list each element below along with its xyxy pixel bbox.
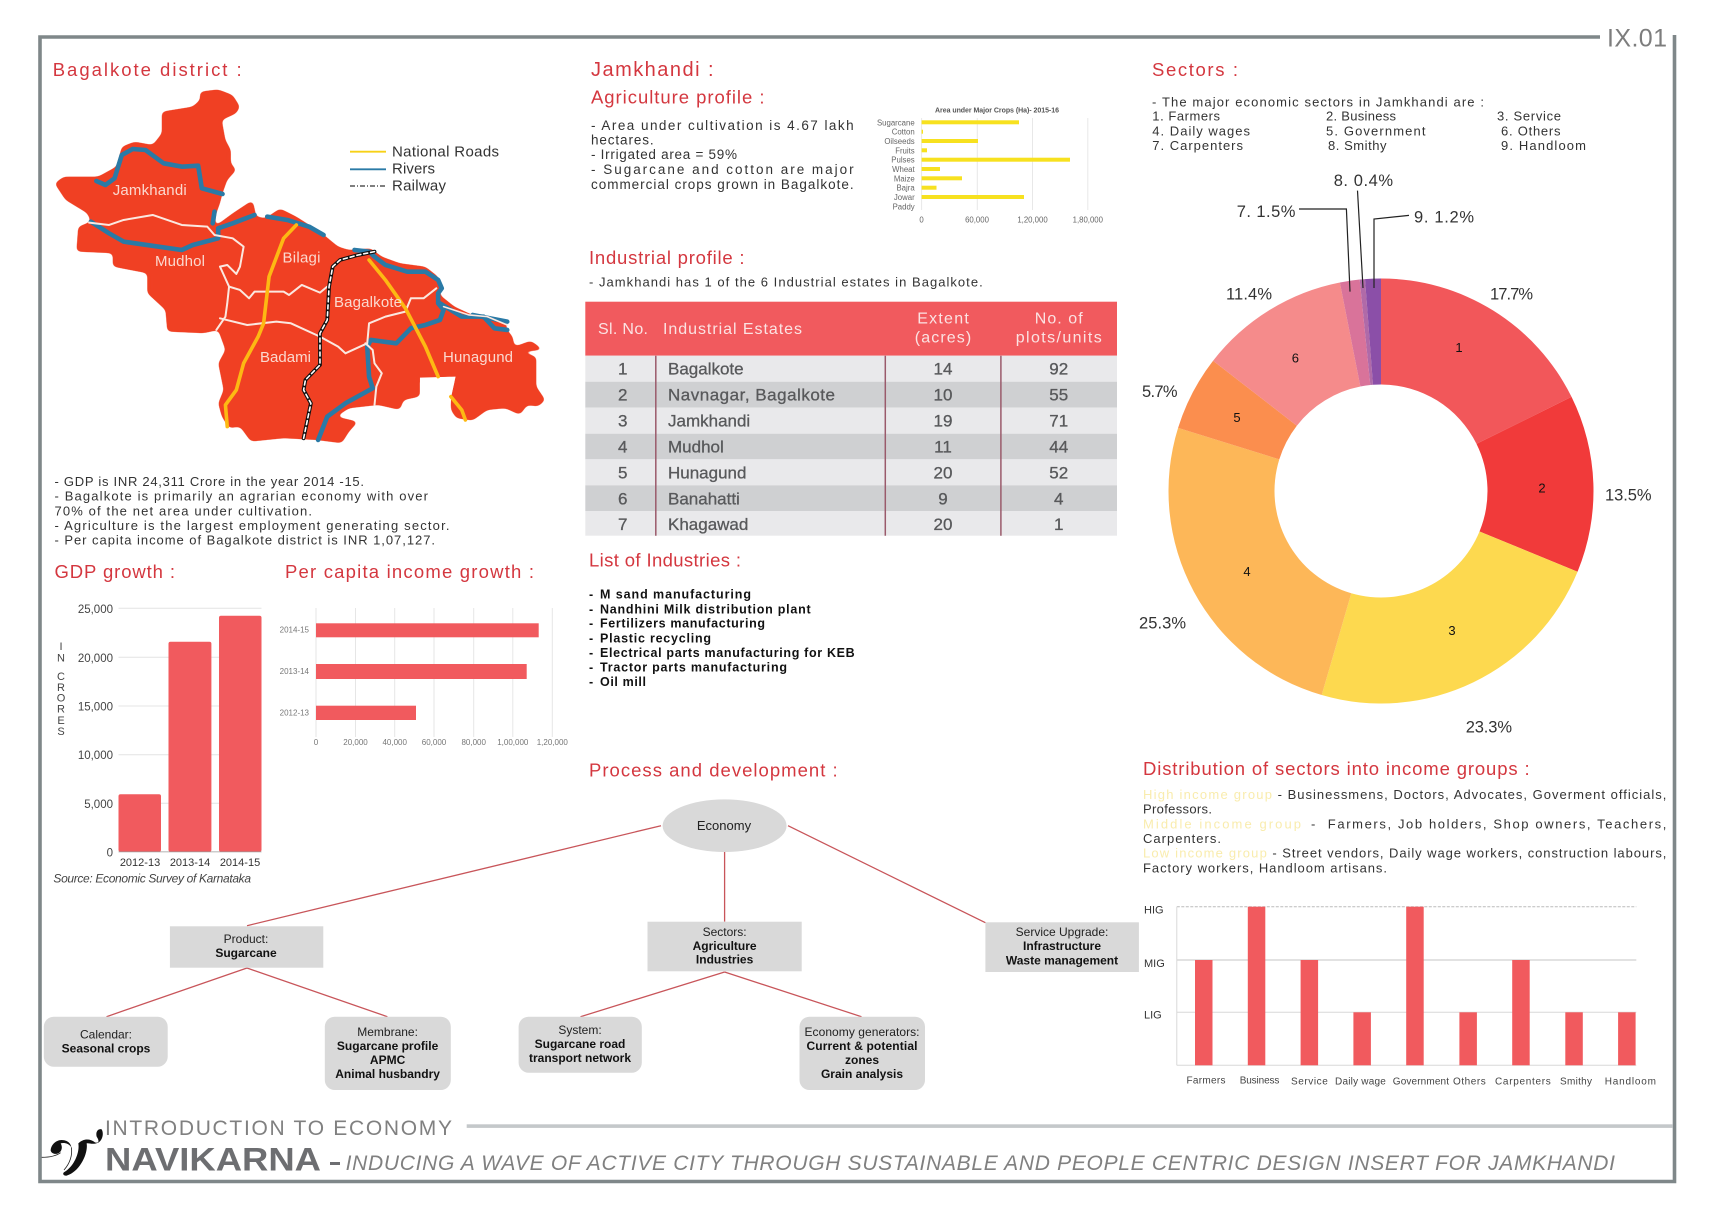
text block: income groups: Low income group <box>1143 846 1267 861</box>
node: system: transport network <box>529 1051 631 1065</box>
text block: agriculture: - Area under cultivation is 4.67 lakh <box>591 118 854 133</box>
table rows: Mudhol <box>668 438 724 457</box>
table header: Extent <box>917 310 969 327</box>
table rows: 6 <box>618 489 627 508</box>
bar chart: sectors by income group: LIG <box>1144 1010 1162 1022</box>
list: industries: Tractor parts manufacturing <box>600 661 787 675</box>
text block: district facts: - Per capita income of Bagalkote district is INR 1,07,127. <box>54 533 435 548</box>
bar chart: per capita income: 2013-14 <box>280 667 310 676</box>
map: place labels: Badami <box>260 349 311 366</box>
donut percentage labels: 5.7% <box>1142 383 1178 401</box>
donut chart: sectors: 2 <box>1538 480 1546 496</box>
table rows: 4 <box>1054 489 1063 508</box>
list: industries: - <box>589 631 593 645</box>
axis title: in crores: C <box>57 671 65 683</box>
map: railway <box>304 252 375 438</box>
text block: sector list: 6. Others <box>1501 124 1561 138</box>
node: economy generators: Current & potential <box>806 1039 918 1053</box>
node: membrane: Sugarcane profile <box>337 1039 439 1053</box>
node: service upgrade: Service Upgrade: <box>1016 925 1108 939</box>
axis title: in crores: N <box>57 652 65 664</box>
bar chart: sectors by income group: Smithy <box>1560 1076 1592 1087</box>
table rows: 52 <box>1049 463 1068 482</box>
text block: income groups: High income group <box>1143 787 1272 802</box>
bar chart: area under major crops: Pulses <box>891 156 915 165</box>
donut callouts: 7. 1.5% <box>1237 203 1296 221</box>
list: industries: Fertilizers manufacturing <box>600 617 765 631</box>
footer title: introduction to economy: INTRODUCTION TO ECONOMY <box>105 1117 452 1140</box>
text block: sector list: 7. Carpenters <box>1152 138 1244 153</box>
node: calendar: Seasonal crops <box>62 1041 151 1055</box>
list: industries: - <box>589 675 593 689</box>
node: product: Sugarcane <box>215 946 277 960</box>
node: economy generators: Economy generators: <box>804 1025 920 1039</box>
map: place labels <box>113 182 513 366</box>
node: service upgrade: Infrastructure <box>1023 939 1101 953</box>
text: industrial estates note: - Jamkhandi has 1 of the 6 Industrial estates in Bagalkote. <box>589 275 983 290</box>
table rows: Hunagund <box>668 463 746 482</box>
bar chart: GDP growth <box>57 604 262 869</box>
text block: income groups: - Businessmens, Doctors, Advocates, Goverment officials, <box>1278 787 1666 802</box>
node: system: Sugarcane road <box>535 1037 625 1051</box>
text block: district facts: - Agriculture is the largest employment generating sector. <box>54 518 449 533</box>
node: service upgrade <box>985 922 1139 972</box>
node: sectors: Sectors: <box>703 925 747 939</box>
bar chart: GDP growth: 15,000 <box>78 702 113 714</box>
heading: sectors: Sectors : <box>1152 59 1238 80</box>
node: membrane: Animal husbandry <box>335 1067 440 1081</box>
heading: list of industries: List of Industries : <box>589 550 741 571</box>
node: economy generators: zones <box>845 1053 879 1067</box>
bar chart: GDP growth: 20,000 <box>78 653 113 665</box>
bar chart: GDP growth: 5,000 <box>84 799 113 811</box>
bar chart: area under major crops: Fruits <box>895 146 915 155</box>
node: membrane <box>325 1017 451 1090</box>
text block: district facts: 70% of the net area under cultivation. <box>54 503 312 518</box>
bar chart: area under major crops: Maize <box>894 174 915 183</box>
table rows: 9 <box>938 489 948 508</box>
text block: sector list: - The major economic sectors in Jamkhandi are : <box>1152 95 1484 110</box>
flow diagram: process and development <box>44 799 1139 1090</box>
bar chart: sectors by income group: Government <box>1393 1076 1449 1087</box>
bar chart: per capita income <box>280 608 568 747</box>
list: industries: - <box>589 661 593 675</box>
bar chart: sectors by income group: HIG <box>1144 904 1164 916</box>
list: industries <box>589 587 855 689</box>
text block: agriculture: hectares. <box>591 132 654 148</box>
table header: (acres) <box>915 330 971 347</box>
text block: sector list: 4. Daily wages <box>1152 124 1250 138</box>
node: calendar: Calendar: <box>80 1027 132 1041</box>
list: industries: Nandhini Milk distribution plant <box>600 602 812 616</box>
axis title: in crores: E <box>57 715 65 727</box>
node: sectors <box>648 922 802 971</box>
connector lines <box>106 826 985 1017</box>
donut callouts <box>1237 172 1474 292</box>
table rows: 4 <box>618 438 627 457</box>
text block: sector list <box>1152 95 1586 153</box>
table rows: Jamkhandi <box>668 412 750 431</box>
text block: sector list: 1. Farmers <box>1152 108 1220 123</box>
axis title: in crores <box>57 641 66 738</box>
bar chart: per capita income: 2014-15 <box>280 626 310 635</box>
bar chart: area under major crops: Paddy <box>893 202 915 211</box>
table rows: Navnagar, Bagalkote <box>668 386 835 405</box>
bar chart: GDP growth: 0 <box>107 848 113 860</box>
table rows: Bagalkote <box>668 360 744 379</box>
text block: income groups: Factory workers, Handloom artisans. <box>1143 860 1387 875</box>
list: industries: Oil mill <box>600 675 646 689</box>
table rows: 1 <box>1054 515 1063 534</box>
table rows: 7 <box>618 515 627 534</box>
bar chart: sectors by income group: Others <box>1453 1076 1486 1087</box>
node: economy: Economy <box>697 818 752 833</box>
axis title: in crores: I <box>59 641 63 653</box>
axis title: in crores: R <box>57 704 65 716</box>
bar chart: area under major crops <box>877 108 1104 225</box>
bar chart: per capita income: 1,20,000 <box>537 738 568 747</box>
bar chart: GDP growth: 2012-13 <box>120 857 160 869</box>
node: system <box>519 1017 642 1073</box>
bar chart: sectors by income group: Carpenters <box>1495 1076 1551 1087</box>
axis title: in crores: O <box>57 692 66 704</box>
text block: district facts <box>54 474 449 548</box>
table rows: Banahatti <box>668 489 740 508</box>
node: membrane: Membrane: <box>357 1025 418 1039</box>
donut percentage labels: 11.4% <box>1226 285 1272 303</box>
table rows: 44 <box>1049 438 1068 457</box>
node: calendar <box>44 1017 168 1067</box>
table rows: 20 <box>934 463 952 482</box>
bar chart: area under major crops: Wheat <box>892 165 916 174</box>
bar chart: GDP growth: 2014-15 <box>220 857 260 869</box>
donut chart: sectors: 5 <box>1233 410 1241 425</box>
bar chart: GDP growth: 2013-14 <box>170 857 210 869</box>
text block: agriculture <box>591 118 854 192</box>
text block: agriculture: - Irrigated area = 59% <box>591 147 737 162</box>
text block: district facts: - GDP is INR 24,311 Crore in the year 2014 -15. <box>54 474 364 489</box>
donut chart: sectors: 1 <box>1455 340 1463 355</box>
text block: income groups: Middle income group <box>1143 816 1301 831</box>
heading: agriculture profile: Agriculture profile : <box>591 86 764 107</box>
table rows <box>585 356 1117 536</box>
node: service upgrade: Waste management <box>1006 954 1118 968</box>
donut chart: sectors: 6 <box>1292 350 1299 366</box>
bar chart: area under major crops: Area under Major Crops (Ha)- 2015-16 <box>935 108 1059 115</box>
table rows: Khagawad <box>668 515 748 534</box>
bar chart: area under major crops: Cotton <box>892 128 915 137</box>
map legend: National Roads <box>392 144 499 161</box>
axis title: in crores: R <box>57 682 65 694</box>
table rows: 55 <box>1049 386 1068 405</box>
heading: distribution of sectors: Distribution of sectors into income groups : <box>1143 758 1530 779</box>
donut percentage labels: 17.7% <box>1490 285 1533 303</box>
table rows: 71 <box>1049 412 1068 431</box>
bar chart: area under major crops: Sugarcane <box>877 118 915 127</box>
bar chart: area under major crops: Oilseeds <box>884 137 915 146</box>
map legend <box>350 144 499 195</box>
table rows: 3 <box>618 412 627 431</box>
donut chart: sectors: 4 <box>1243 564 1251 579</box>
text block: income groups: Professors. <box>1143 802 1212 817</box>
donut percentage labels: 25.3% <box>1139 615 1186 633</box>
list: industries: - <box>589 602 593 616</box>
list: industries: - <box>589 617 593 631</box>
bar chart: area under major crops: 60,000 <box>965 216 990 225</box>
map: place labels: Hunagund <box>443 349 513 366</box>
table rows: 1 <box>618 360 627 379</box>
bar chart: sectors by income group: Daily wage <box>1335 1076 1386 1087</box>
map: place labels: Jamkhandi <box>113 182 187 199</box>
node: system: System: <box>558 1023 602 1037</box>
bar chart: per capita income: 60,000 <box>422 738 447 747</box>
list: industries: M sand manufacturing <box>600 587 751 601</box>
table: industrial estates <box>585 302 1117 536</box>
heading: per capita income growth: Per capita income growth : <box>285 561 534 582</box>
text block: income groups: Carpenters. <box>1143 831 1221 846</box>
text block: income groups: - <box>1311 816 1315 831</box>
node: sectors: Industries <box>696 952 754 966</box>
donut callouts: 9. 1.2% <box>1414 209 1474 227</box>
table rows: 5 <box>618 463 627 482</box>
map: national roads <box>225 225 465 427</box>
bar chart: sectors by income group: Service <box>1291 1076 1328 1087</box>
bar chart: sectors by income group: Business <box>1240 1075 1279 1086</box>
heading: Jamkhandi: Jamkhandi : <box>591 59 714 81</box>
bar chart: GDP growth: 25,000 <box>78 604 113 616</box>
bar chart: per capita income: 40,000 <box>382 738 407 747</box>
map: place labels: Bilagi <box>282 250 320 266</box>
donut percentage labels <box>1139 285 1652 736</box>
text block: agriculture: - Sugarcane and cotton are major <box>591 162 854 177</box>
map: place labels: Mudhol <box>155 253 205 270</box>
text block: sector list: 2. Business <box>1326 108 1396 123</box>
source note: Source: Economic Survey of Karnataka <box>53 872 251 886</box>
bar chart: area under major crops: Jowar <box>894 193 915 202</box>
list: industries: - <box>589 646 593 660</box>
table rows: 92 <box>1049 360 1068 379</box>
logo: Navikarna swirl <box>42 1129 103 1176</box>
text block: income groups: Farmers, Job holders, Shop owners, Teachers, <box>1328 816 1666 831</box>
map: Bagalkote district <box>55 89 545 443</box>
donut callouts: 8. 0.4% <box>1334 172 1393 190</box>
list: industries: Electrical parts manufacturing for KEB <box>600 646 855 660</box>
bar chart: area under major crops: Bajra <box>896 184 915 193</box>
donut chart: sectors <box>1168 278 1593 703</box>
heading: GDP growth: GDP growth : <box>54 561 175 582</box>
bar chart: sectors by income group: MIG <box>1144 958 1165 970</box>
bar chart: area under major crops: 1,80,000 <box>1073 216 1104 225</box>
text block: income groups <box>1143 787 1666 875</box>
donut percentage labels: 23.3% <box>1466 718 1512 736</box>
table header: plots/units <box>1016 330 1102 347</box>
bar chart: per capita income: 80,000 <box>461 738 486 747</box>
map legend: Rivers <box>392 161 435 178</box>
node: product: Product: <box>224 932 268 946</box>
text block: agriculture: commercial crops grown in Bagalkote. <box>591 177 854 192</box>
table rows: 2 <box>618 386 627 405</box>
table rows: 19 <box>934 412 952 431</box>
heading: process and development: Process and development : <box>589 760 838 781</box>
map: taluk boundaries <box>89 215 507 405</box>
bar chart: GDP growth: 10,000 <box>78 750 113 762</box>
table rows: 20 <box>934 515 952 534</box>
text block: sector list: 3. Service <box>1497 108 1561 123</box>
list: industries: - <box>589 587 593 601</box>
heading: industrial profile: Industrial profile : <box>589 247 744 268</box>
table rows: 11 <box>934 438 952 457</box>
text block: income groups: - Street vendors, Daily wage workers, construction labours, <box>1272 846 1666 861</box>
heading: Bagalkote district: Bagalkote district : <box>53 59 242 80</box>
node: economy generators: Grain analysis <box>821 1067 903 1081</box>
text block: sector list: 8. Smithy <box>1328 138 1387 153</box>
node: sectors: Agriculture <box>693 939 757 953</box>
bar chart: sectors by income group: Farmers <box>1186 1075 1226 1086</box>
bar chart: sectors by income group <box>1144 904 1656 1087</box>
table header: No. of <box>1035 310 1083 327</box>
node: membrane: APMC <box>370 1053 406 1067</box>
text block: sector list: 9. Handloom <box>1501 138 1586 153</box>
table header <box>585 302 1117 356</box>
footer title: NAVIKARNA: NAVIKARNA <box>105 1142 321 1178</box>
node: economy generators <box>800 1017 925 1090</box>
donut chart: sectors: 3 <box>1448 623 1456 638</box>
donut percentage labels: 13.5% <box>1605 486 1652 504</box>
list: industries: Plastic recycling <box>600 631 711 645</box>
bar chart: per capita income: 1,00,000 <box>497 738 529 747</box>
bar chart: per capita income: 2012-13 <box>280 708 310 717</box>
map legend: Railway <box>392 178 446 195</box>
bar chart: per capita income: 0 <box>314 738 319 747</box>
bar chart: area under major crops: 1,20,000 <box>1017 216 1048 225</box>
node: product <box>170 926 323 968</box>
table rows: 14 <box>934 360 952 379</box>
text block: sector list: 5. Government <box>1326 124 1426 138</box>
table rows: 10 <box>934 386 952 405</box>
bar chart: per capita income: 20,000 <box>343 738 368 747</box>
axis title: in crores: S <box>57 726 65 738</box>
table header: Industrial Estates <box>663 321 802 338</box>
bar chart: sectors by income group: Handloom <box>1605 1076 1656 1087</box>
text block: district facts: - Bagalkote is primarily an agrarian economy with over <box>54 489 429 504</box>
node: economy <box>663 799 787 852</box>
bar chart: area under major crops: 0 <box>919 216 924 225</box>
table header: Sl. No. <box>598 321 648 338</box>
map: rivers <box>91 149 507 440</box>
footer tagline: INDUCING A WAVE OF ACTIVE CITY THROUGH SUSTAINABLE AND PEOPLE CENTRIC DESIGN INSERT FOR JAMKHANDI <box>346 1152 1615 1175</box>
sheet number: IX.01 <box>1607 24 1667 52</box>
map: place labels: Bagalkote <box>334 294 402 311</box>
footer rule <box>467 1124 1673 1128</box>
